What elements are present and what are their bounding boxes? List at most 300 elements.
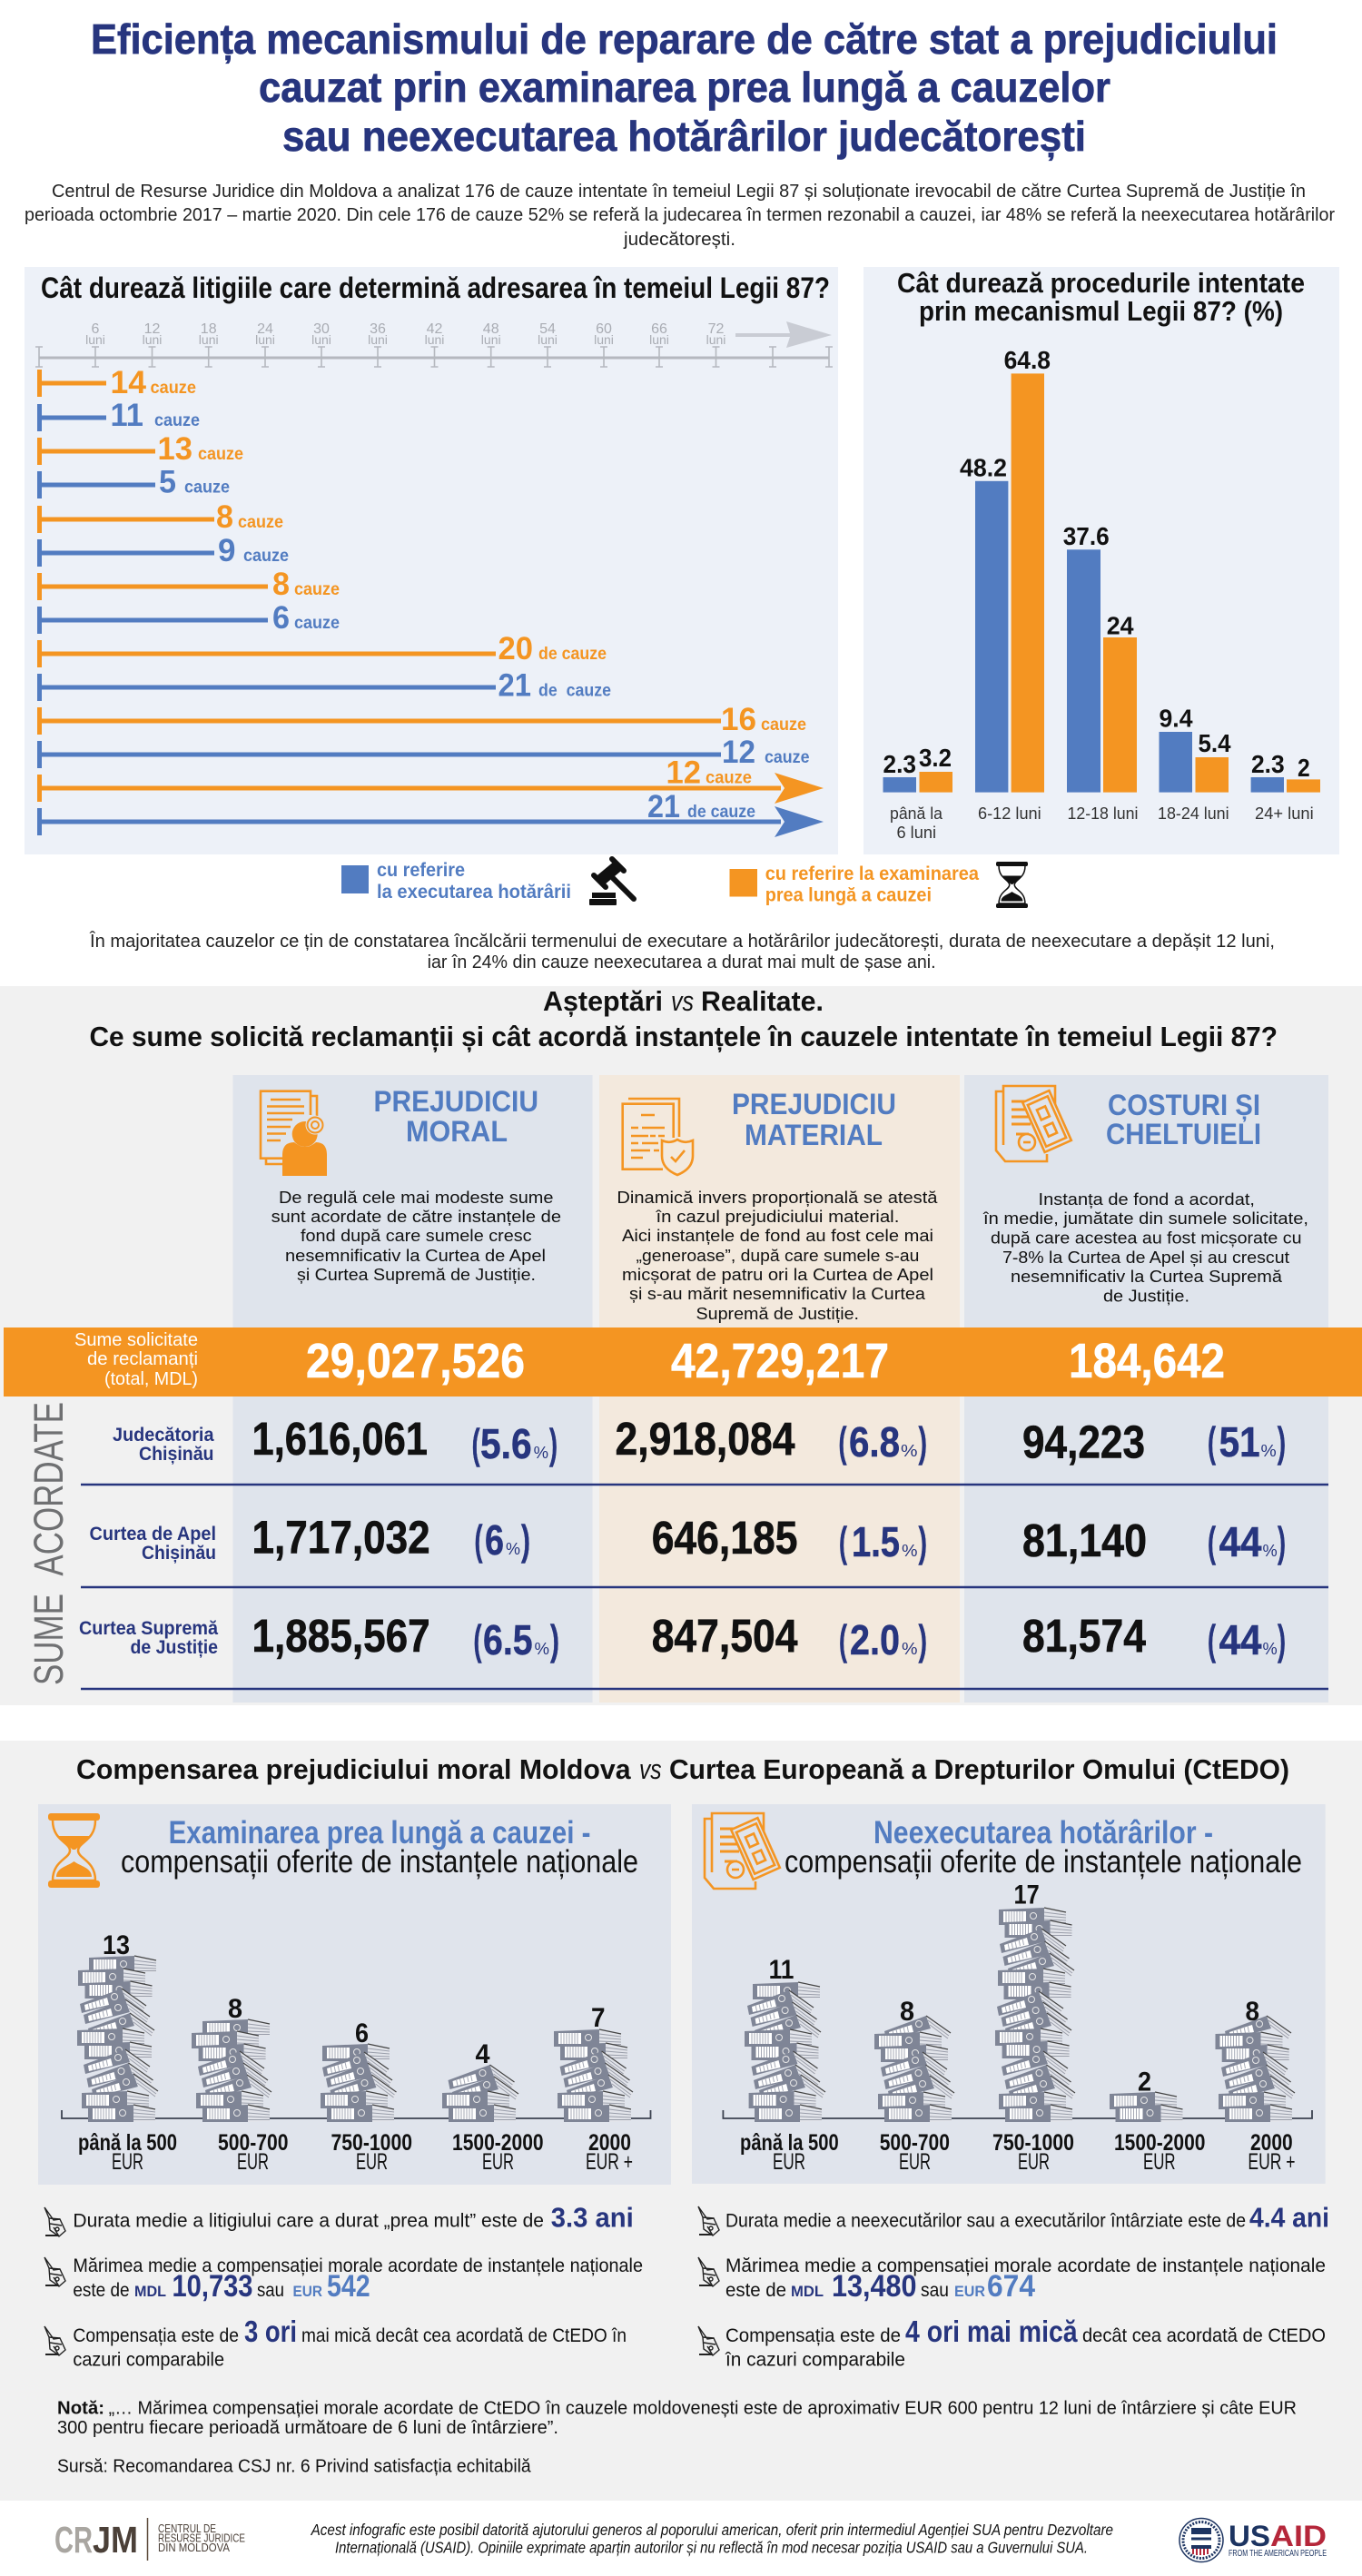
findings: excessive length: MDL [134, 2283, 166, 2300]
findings: non-enforcement: este de [725, 2280, 786, 2301]
orange case counts: 13 [158, 431, 192, 467]
intro text: judecătorești. [623, 229, 735, 250]
time axis: luni [199, 332, 219, 347]
band numbers [306, 1334, 1225, 1388]
text: moral damage: sunt acordate de către instanțele de [271, 1207, 561, 1226]
stack counts: 7 [591, 2003, 605, 2033]
awarded percentages: % [534, 1640, 549, 1658]
intro text: perioada octombrie 2017 – martie 2020. Din cele 176 de cauze 52% se referă la judecarea în termen rezonabil a cauzei, iar 48% se referă la neexecutarea hotărârilor [25, 204, 1335, 225]
band label: (total, MDL) [104, 1369, 198, 1389]
category labels: EUR [482, 2149, 514, 2175]
orange case counts [111, 365, 806, 791]
text: moral damage: nesemnificativ la Curtea de Apel [285, 1246, 546, 1265]
findings: non-enforcement: în cazuri comparabile [725, 2350, 905, 2371]
awarded percentages: % [901, 1442, 917, 1460]
blue case counts: cauze [154, 411, 200, 430]
awarded percentages: % [1262, 1640, 1278, 1658]
awarded percentages: ( [1208, 1418, 1216, 1466]
text: costs: nesemnificativ la Curtea Supremă [1011, 1267, 1283, 1286]
time axis: luni [255, 332, 275, 347]
awarded percentages: ) [1278, 1518, 1286, 1565]
awarded percentages: ( [839, 1418, 847, 1466]
heading: costs [1106, 1089, 1261, 1150]
blue case counts [111, 398, 810, 824]
category labels: EUR [237, 2149, 269, 2175]
title [91, 15, 1278, 161]
bar chart heading: prin mecanismul Legii 87? (%) [919, 295, 1283, 327]
time axis: 36 [370, 321, 386, 337]
time axis: 42 [427, 321, 443, 337]
time axis: 18 [201, 321, 217, 337]
stack: 8 folders 2000+ EUR [1215, 2016, 1295, 2122]
text: costs: 7-8% la Curtea de Apel și au crescut [1002, 1248, 1289, 1267]
note: Notă: [57, 2398, 104, 2419]
awarded amounts: 94,223 [1022, 1416, 1145, 1468]
awarded percentages: 6.8 [849, 1418, 900, 1466]
bar values: 3.2 [919, 744, 952, 772]
findings: non-enforcement: 13,480 [832, 2269, 917, 2304]
heading: costs: CHELTUIELI [1106, 1118, 1261, 1150]
band numbers: 184,642 [1069, 1334, 1225, 1388]
blue case counts: 21 [647, 789, 680, 824]
orange case counts: 8 [272, 567, 290, 602]
findings: excessive length: EUR [292, 2283, 322, 2300]
awarded percentages: ) [919, 1616, 927, 1663]
legend: enforcement of judgments [341, 860, 571, 903]
findings: non-enforcement: sau [921, 2280, 949, 2301]
stack counts [103, 1930, 605, 2069]
logo: CRJM [54, 2518, 245, 2561]
awarded percentages: 44 [1219, 1518, 1262, 1565]
awarded percentages: ( [839, 1518, 847, 1565]
findings: excessive length: Mărimea medie a compensației morale acordate de instanțele naționale [73, 2255, 643, 2276]
logo: USAID: US [1229, 2520, 1270, 2552]
time axis: luni [368, 332, 388, 347]
findings: excessive length: cazuri comparabile [73, 2350, 224, 2371]
orange case counts: cauze [294, 580, 340, 599]
logo: CRJM: JM [93, 2519, 138, 2561]
awarded amounts: 1,717,032 [252, 1512, 430, 1564]
category labels: EUR [773, 2149, 805, 2175]
range bars orange and blue [40, 370, 781, 835]
blue case counts: 11 [111, 398, 143, 433]
arrow: time direction [735, 321, 832, 348]
awarded amounts: 847,504 [652, 1610, 798, 1662]
time axis: luni [85, 332, 105, 347]
time axis: luni [143, 332, 162, 347]
bar values: 48.2 [960, 454, 1007, 481]
awarded percentages: ( [1208, 1616, 1216, 1663]
bar category labels [890, 804, 1314, 842]
source: Sursă: Recomandarea CSJ nr. 6 Privind satisfacția echitabilă [57, 2456, 531, 2477]
awarded amounts: 1,616,061 [252, 1413, 428, 1465]
category labels: 1500-2000 [452, 2130, 544, 2156]
stack: 4 folders 1500-2000 EUR [442, 2065, 518, 2122]
awarded percentages: ) [1278, 1616, 1286, 1663]
bar values: 64.8 [1004, 346, 1051, 374]
bullet icons: pen nibs [44, 2206, 719, 2355]
text: costs: după care acestea au fost micșorate cu [991, 1229, 1302, 1248]
orange case counts: cauze [198, 445, 243, 464]
findings: non-enforcement: Mărimea medie a compensației morale acordate de instanțele naționale [725, 2255, 1326, 2276]
bar values: 2 [1298, 754, 1310, 782]
row dividers [81, 1485, 1328, 1689]
bar values: 24 [1107, 611, 1134, 639]
findings: non-enforcement: Durata medie a neexecutărilor sau a executărilor întârziate este de [725, 2211, 1246, 2232]
awarded percentages: % [534, 1444, 548, 1462]
orange case counts: 12 [666, 755, 701, 791]
blue case counts: de cauze [687, 803, 755, 822]
text: material damage: micșorat de patru ori la Curtea de Apel [622, 1265, 933, 1284]
category labels: EUR [1143, 2149, 1175, 2175]
findings: non-enforcement: MDL [791, 2283, 824, 2300]
category labels: până la 500 [740, 2130, 839, 2156]
bar category labels: 24+ luni [1255, 804, 1314, 823]
intro text [25, 181, 1335, 250]
row labels: courts: de Justiție [131, 1637, 218, 1658]
section heading: Realitate. [701, 985, 824, 1017]
stack counts: 2 [1138, 2068, 1151, 2097]
category labels: 500-700 [880, 2130, 950, 2156]
orange case counts: 14 [111, 365, 147, 400]
stack counts [769, 1880, 1259, 2097]
text: costs: Instanța de fond a acordat, [1039, 1189, 1255, 1209]
awarded percentages: 44 [1219, 1616, 1262, 1663]
findings: excessive length: 3 ori [244, 2314, 297, 2348]
text: costs: de Justiție. [1103, 1287, 1189, 1306]
title: cauzat prin examinarea prea lungă a cauzelor [259, 64, 1110, 111]
stack: 6 folders 750-1000 EUR [321, 2044, 396, 2122]
section heading: Ce sume solicită reclamanții și cât acordă instanțele în cauzele intentate în temeiul Legii 87? [89, 1021, 1278, 1052]
category labels: EUR [1018, 2149, 1050, 2175]
bar values: 2.3 [883, 750, 916, 778]
blue case counts: cauze [294, 614, 340, 633]
awarded percentages: 6.5 [483, 1616, 533, 1663]
timeline heading: Cât durează litigiile care determină adresarea în temeiul Legii 87? [41, 271, 830, 304]
logo: USAID [1179, 2519, 1327, 2562]
text: material damage: și s-au mărit nesemnificativ la Curtea [629, 1284, 926, 1303]
stack: 7 folders 2000+ EUR [554, 2029, 633, 2122]
text: material damage [617, 1188, 938, 1323]
category labels: 750-1000 [331, 2130, 412, 2156]
findings: excessive length: 542 [327, 2269, 370, 2304]
icon: orange hourglass [48, 1813, 100, 1888]
awarded percentages: ) [919, 1418, 927, 1466]
stack: 8 folders 500-700 EUR [874, 2016, 954, 2122]
orange case counts: cauze [238, 513, 283, 532]
blue case counts: 12 [722, 735, 755, 770]
stack: 8 folders 500-700 EUR [192, 2019, 271, 2122]
legend: excessive length of proceedings [730, 864, 979, 906]
section heading: vs [639, 1753, 662, 1785]
orange case counts: cauze [706, 769, 752, 788]
logo: CRJM: RESURSE JURIDICE [158, 2532, 245, 2544]
stack: 13 folders up to 500 EUR [77, 1956, 158, 2122]
findings: excessive length [73, 2202, 643, 2371]
rotated label: sums awarded: SUME ACORDATE [25, 1402, 72, 1685]
blue case counts: 9 [218, 533, 236, 568]
awarded percentages: % [1260, 1442, 1277, 1460]
intro text: Centrul de Resurse Juridice din Moldova a analizat 176 de cauze intentate în temeiul Legii 87 și soluționate irevocabil de către Curtea Supremă de Justiție în [52, 181, 1306, 202]
awarded percentages: ) [549, 1420, 558, 1467]
chart panel heading [785, 1815, 1302, 1880]
time axis [35, 321, 833, 367]
chart panel: excessive length [38, 1804, 671, 2185]
bar category labels: 18-24 luni [1158, 804, 1229, 823]
note: „… Mărimea compensației morale acordate de CtEDO în cauzele moldovenești este de aproximativ EUR 600 pentru 12 luni de întârziere și câte EUR [109, 2398, 1297, 2419]
axis [62, 2110, 650, 2118]
awarded amounts: 646,185 [652, 1512, 797, 1564]
stack counts: 8 [228, 1994, 242, 2024]
text: moral damage: și Curtea Supremă de Justiție. [297, 1265, 536, 1284]
heading: material damage: MATERIAL [745, 1119, 883, 1151]
findings: non-enforcement: Compensația este de [725, 2325, 901, 2346]
logo: CRJM: DIN MOLDOVA [158, 2541, 230, 2554]
column: costs and expenses [964, 1075, 1328, 1703]
time axis: luni [594, 332, 614, 347]
awarded amounts [252, 1413, 1147, 1662]
icon: document with banknotes [705, 1813, 780, 1889]
bar category labels: până la [890, 804, 943, 823]
time axis: luni [481, 332, 501, 347]
blue case counts: cauze [243, 547, 289, 566]
section heading [89, 985, 1278, 1052]
panel: moral damage compensation [0, 1741, 1362, 2501]
band numbers: 42,729,217 [671, 1334, 889, 1388]
text: moral damage [271, 1188, 561, 1284]
bar category labels: 12-18 luni [1068, 804, 1139, 823]
category labels: 2000 [1250, 2130, 1293, 2156]
awarded amounts: 81,140 [1022, 1515, 1147, 1566]
time axis: 30 [313, 321, 330, 337]
awarded amounts: 81,574 [1022, 1610, 1147, 1662]
awarded percentages: 6 [485, 1516, 504, 1564]
awarded percentages: ( [839, 1616, 847, 1663]
category labels [740, 2130, 1295, 2175]
stack counts: 4 [476, 2039, 490, 2069]
awarded percentages: ) [550, 1616, 559, 1663]
logo: CRJM: CENTRUL DE [158, 2522, 216, 2535]
findings: excessive length: Compensația este de [73, 2325, 239, 2346]
awarded amounts: 2,918,084 [616, 1413, 795, 1465]
title: Eficiența mecanismului de reparare de către stat a prejudiciului [91, 15, 1278, 64]
panel: procedure duration bar chart [864, 267, 1339, 854]
stack counts: 8 [1246, 1997, 1259, 2027]
time axis: 12 [144, 321, 160, 337]
stack counts: 17 [1013, 1880, 1040, 1910]
blue case counts: 6 [272, 600, 290, 636]
awarded percentages: % [902, 1542, 917, 1560]
legend: excessive length of proceedings: cu referire la examinarea [765, 864, 979, 884]
findings: non-enforcement: 4 ori mai mică [905, 2314, 1078, 2348]
category labels: EUR [899, 2149, 931, 2175]
icon: document with banknotes [996, 1086, 1071, 1161]
awarded percentages: 51 [1219, 1418, 1260, 1466]
band numbers: 29,027,526 [306, 1334, 525, 1388]
blue case counts: de cauze [538, 681, 611, 701]
bar chart heading [897, 267, 1305, 327]
note [57, 2398, 1297, 2438]
text: material damage: Dinamică invers proporțională se atestă [617, 1188, 938, 1207]
legend: excessive length of proceedings: prea lungă a cauzei [765, 885, 932, 906]
footer disclaimer [311, 2521, 1113, 2557]
time axis: 48 [483, 321, 499, 337]
awarded percentages: ( [474, 1616, 482, 1663]
text: material damage: Supremă de Justiție. [696, 1304, 859, 1323]
bar values: 37.6 [1063, 522, 1110, 550]
section heading: Curtea Europeană a Drepturilor Omului (CtEDO) [669, 1753, 1289, 1785]
chart panel: non-enforcement [692, 1804, 1326, 2184]
logo: CRJM: CR [54, 2519, 93, 2561]
category labels: 2000 [588, 2130, 631, 2156]
chart panel heading: Neexecutarea hotărârilor - [873, 1815, 1213, 1851]
row labels: courts [79, 1425, 218, 1658]
category labels: 750-1000 [992, 2130, 1074, 2156]
blue bars [883, 481, 1284, 793]
time axis: luni [425, 332, 444, 347]
blue case counts: 5 [159, 465, 176, 499]
findings: excessive length: 3.3 ani [551, 2202, 634, 2234]
column: material damage [599, 1075, 960, 1703]
bar chart heading: Cât durează procedurile intentate [897, 267, 1305, 299]
stack counts: 6 [355, 2018, 369, 2048]
findings: excessive length: 10,733 [173, 2269, 252, 2304]
findings: non-enforcement: 674 [987, 2269, 1035, 2304]
summary text [89, 931, 1275, 972]
axis [723, 2110, 1312, 2118]
chart panel heading: compensații oferite de instanțele naționale [121, 1844, 638, 1880]
logo: USAID: FROM THE AMERICAN PEOPLE [1229, 2549, 1327, 2559]
title: sau neexecutarea hotărârilor judecătorești [282, 113, 1086, 161]
category labels: 500-700 [218, 2130, 289, 2156]
bar values: 5.4 [1199, 729, 1231, 757]
heading: costs: COSTURI ȘI [1108, 1089, 1260, 1121]
awarded percentages: % [506, 1540, 520, 1558]
category labels: EUR + [586, 2149, 633, 2175]
section heading: Compensarea prejudiciului moral Moldova [76, 1753, 631, 1785]
text: moral damage: fond după care sumele cresc [301, 1226, 532, 1245]
icon: document and person [261, 1091, 327, 1176]
bar values: 2.3 [1251, 750, 1285, 778]
column: moral damage [232, 1075, 592, 1703]
summary text: În majoritatea cauzelor ce țin de constatarea încălcării termenului de executare a hotărârilor judecătorești, durata de neexecutare a depășit 12 luni, [89, 931, 1275, 952]
findings: non-enforcement: decât cea acordată de CtEDO [1082, 2325, 1326, 2346]
stack: 17 folders 750-1000 EUR [995, 1908, 1075, 2122]
awarded percentages: ) [1278, 1418, 1286, 1466]
time axis: luni [311, 332, 331, 347]
findings: non-enforcement: 4.4 ani [1249, 2202, 1329, 2234]
awarded amounts: 1,885,567 [252, 1610, 430, 1662]
heading: moral damage [374, 1085, 538, 1148]
footer disclaimer: Acest infografic este posibil datorită ajutorului generos al poporului american, oferit prin intermediul Agenției SUA pentru Dezvoltare [311, 2521, 1113, 2539]
time axis: 24 [257, 321, 273, 337]
text: costs: în medie, jumătate din sumele solicitate, [982, 1209, 1308, 1228]
category labels: 1500-2000 [1114, 2130, 1206, 2156]
text: costs [982, 1189, 1308, 1306]
row labels: courts: Judecătoria [113, 1425, 214, 1446]
section heading: vs [671, 985, 694, 1017]
icon: document and shield [623, 1099, 693, 1175]
heading: moral damage: MORAL [406, 1115, 508, 1148]
time axis: luni [706, 332, 725, 347]
orange case counts: cauze [761, 716, 806, 735]
band label [74, 1330, 198, 1389]
category labels: EUR [356, 2149, 388, 2175]
awarded percentages [472, 1418, 1286, 1663]
logo: USAID: AID [1270, 2520, 1327, 2552]
awarded percentages: ( [1208, 1518, 1216, 1565]
heading: material damage: PREJUDICIU [732, 1088, 896, 1120]
blue case counts: 21 [498, 668, 531, 703]
footer disclaimer: Internațională (USAID). Opiniile exprimate aparțin autorilor și nu reflectă în mod necesar poziția USAID sau a Guvernului SUA. [335, 2539, 1088, 2557]
panel: duration of litigation timeline [25, 267, 838, 854]
text: material damage: Aici instanțele de fond au fost cele mai [622, 1226, 933, 1245]
awarded percentages: % [1262, 1542, 1278, 1560]
awarded percentages: ( [474, 1516, 483, 1564]
awarded percentages: ) [919, 1518, 927, 1565]
row labels: courts: Curtea Supremă [79, 1618, 218, 1639]
heading: material damage [732, 1088, 896, 1151]
findings: non-enforcement [725, 2202, 1329, 2371]
time axis: 72 [708, 321, 725, 337]
orange case counts: de cauze [538, 645, 607, 664]
icon: gavel [589, 859, 634, 905]
awarded percentages: ) [521, 1516, 530, 1564]
text: material damage: în cazul prejudiciului material. [655, 1207, 899, 1226]
bar category labels: 6-12 luni [978, 804, 1041, 823]
chart panel heading: Examinarea prea lungă a cauzei - [169, 1815, 590, 1851]
findings: excessive length: mai mică decât cea acordată de CtEDO în [301, 2325, 627, 2346]
bar category labels: 6 luni [897, 823, 936, 842]
text: material damage: „generoase”, după care sumele s-au [636, 1246, 919, 1265]
stack counts: 11 [769, 1955, 794, 1985]
section heading: Așteptări [543, 985, 663, 1017]
time axis: luni [649, 332, 669, 347]
legend: enforcement of judgments: cu referire [377, 860, 465, 881]
blue case counts: cauze [765, 748, 810, 767]
heading: moral damage: PREJUDICIU [374, 1085, 538, 1118]
band: sums requested [4, 1327, 1362, 1397]
stack counts: 8 [900, 1997, 914, 2027]
bar values: 9.4 [1159, 704, 1193, 732]
row labels: courts: Chișinău [142, 1543, 216, 1564]
note: 300 pentru fiecare perioadă următoare de 6 luni de întârziere”. [57, 2417, 558, 2438]
findings: excessive length: sau [257, 2280, 284, 2301]
orange case counts: 16 [721, 702, 756, 737]
awarded percentages: ( [472, 1420, 480, 1467]
chart panel heading: compensații oferite de instanțele naționale [785, 1844, 1302, 1880]
awarded percentages: % [902, 1640, 917, 1658]
orange case counts: 8 [216, 499, 233, 535]
awarded percentages: 2.0 [850, 1616, 900, 1663]
legend: enforcement of judgments: la executarea hotărârii [377, 882, 571, 903]
time axis: 66 [651, 321, 667, 337]
arrowheads [775, 773, 824, 837]
time axis: 6 [92, 321, 100, 337]
category labels [78, 2130, 633, 2175]
chart panel heading [121, 1815, 638, 1880]
time axis: 60 [596, 321, 612, 337]
panel: expectations vs reality [0, 985, 1362, 1705]
time axis: luni [538, 332, 558, 347]
awarded percentages: 1.5 [852, 1518, 900, 1565]
stack: 11 folders up to 500 EUR [745, 1982, 825, 2122]
bar values [883, 346, 1310, 782]
findings: non-enforcement: EUR [954, 2283, 985, 2300]
awarded percentages: 5.6 [480, 1420, 532, 1467]
findings: excessive length: Durata medie a litigiului care a durat „prea mult” este de [73, 2211, 544, 2232]
row labels: courts: Chișinău [139, 1444, 214, 1465]
